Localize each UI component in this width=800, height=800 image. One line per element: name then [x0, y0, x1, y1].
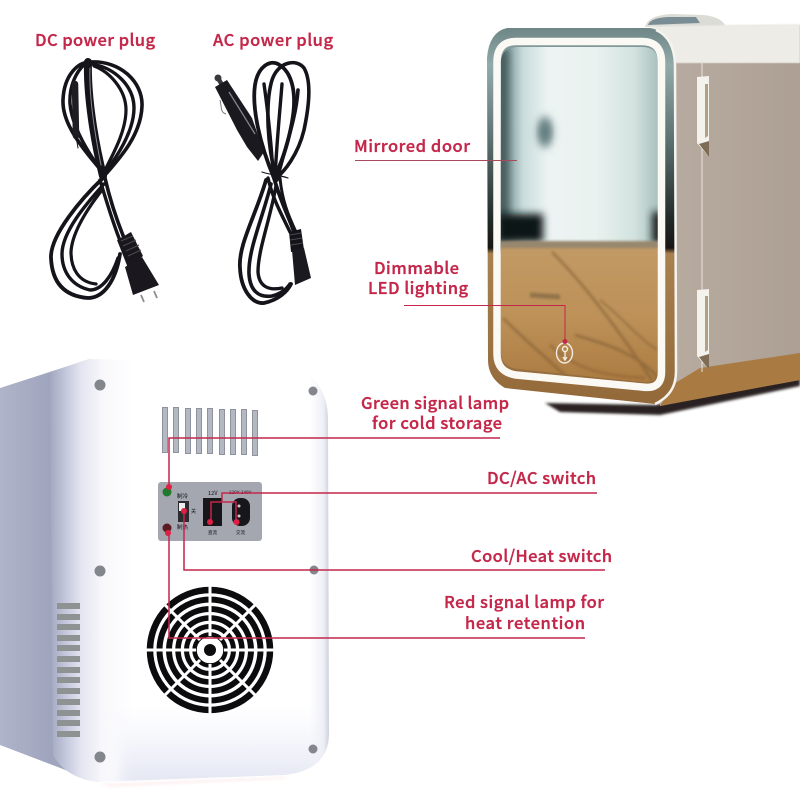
door white edge	[655, 30, 676, 404]
control panel	[158, 482, 262, 541]
touch button icon	[556, 343, 572, 363]
label: Red signal lamp for heat retention: heat retention	[465, 610, 585, 634]
label: Dimmable LED lighting: LED lighting	[368, 275, 468, 299]
icon: wall plug head	[117, 232, 159, 302]
mirror surface	[497, 47, 667, 390]
label: Cool/Heat switch	[181, 508, 612, 570]
icon: fan grille	[142, 582, 278, 718]
soft shadow under fridge	[545, 376, 800, 415]
LED light ring	[497, 42, 662, 387]
panel: back of fridge	[0, 359, 329, 790]
title: AC power plug: AC power plug	[213, 27, 333, 51]
panel labels	[177, 489, 252, 536]
label: Mirrored door: Mirrored door	[354, 133, 470, 157]
label: Cool/Heat switch: Cool/Heat switch	[471, 543, 612, 567]
fridge body side	[650, 24, 800, 406]
label: Red signal lamp for heat retention: Red signal lamp for	[444, 589, 604, 613]
hinge upper	[697, 76, 709, 157]
green lamp	[162, 488, 172, 496]
side vents	[57, 603, 80, 737]
panel labels: 220V-240V	[229, 490, 252, 496]
handle on top	[645, 14, 726, 27]
panel labels: 12V	[208, 489, 218, 497]
icon: AC power cable with car plug	[240, 63, 309, 303]
icon: car cigarette plug and connector	[214, 74, 311, 285]
fridge side face	[0, 359, 97, 782]
label: Green signal lamp for cold storage: Green signal lamp	[361, 390, 509, 414]
label: DC/AC switch	[207, 465, 597, 525]
red lamp	[162, 524, 172, 532]
label: Dimmable LED lighting	[368, 255, 568, 344]
DC socket	[203, 498, 222, 526]
title: DC power plug: DC power plug	[35, 27, 155, 51]
panel labels: 直流	[208, 529, 217, 536]
panel labels: 制冷	[177, 492, 189, 500]
pink floor glow	[100, 777, 285, 787]
lower shading of rear face	[118, 737, 317, 781]
screws	[94, 380, 318, 762]
label: Red signal lamp for heat retention	[165, 530, 604, 638]
rocker switch	[178, 501, 189, 522]
label: Green signal lamp for cold storage: for cold storage	[372, 410, 502, 434]
door outer frame	[487, 28, 675, 404]
panel labels: 关	[191, 508, 196, 515]
label: Green signal lamp for cold storage	[166, 390, 509, 490]
AC socket	[232, 498, 250, 526]
fridge rear face	[50, 359, 329, 782]
icon: DC power cable with wall plug	[51, 62, 142, 298]
top vents	[162, 408, 258, 456]
panel: mirrored door fridge	[487, 14, 800, 415]
panel labels: 制热	[177, 523, 189, 531]
label: DC/AC switch: DC/AC switch	[487, 465, 596, 489]
panel labels: 交流	[236, 529, 245, 536]
hinge lower	[697, 289, 709, 370]
label: Dimmable LED lighting: Dimmable	[374, 255, 459, 279]
